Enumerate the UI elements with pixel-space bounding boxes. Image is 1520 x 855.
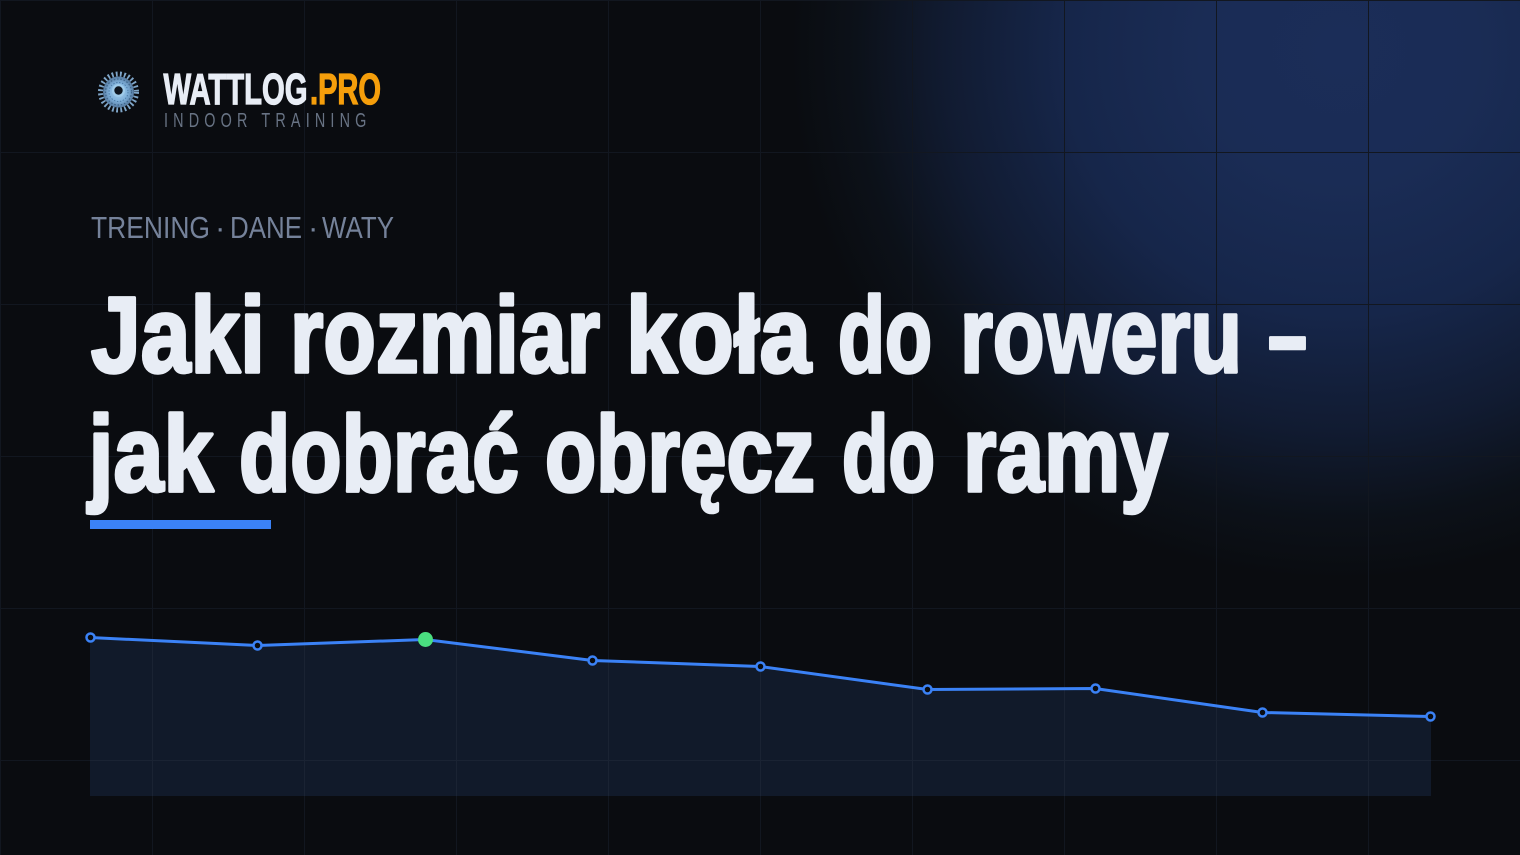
title: do [838, 274, 932, 395]
brand suffix: .PRO [310, 65, 381, 114]
icon: bicycle cassette [100, 74, 136, 110]
chart line [90, 638, 1430, 716]
title: – [1268, 274, 1307, 395]
title: rozmiar [290, 274, 600, 395]
title: ramy [963, 393, 1168, 514]
chart area fill [90, 638, 1431, 796]
highlighted point [418, 632, 433, 647]
eyebrow label: · [308, 210, 318, 245]
title: dobrać [239, 393, 519, 514]
eyebrow label: WATY [322, 210, 394, 245]
chart points [86, 634, 1434, 720]
eyebrow label: · [215, 210, 225, 245]
brand name: WATTLOG [164, 65, 308, 114]
title: jak [87, 393, 214, 514]
title: koła [626, 274, 812, 395]
title: roweru [960, 274, 1242, 395]
logo [100, 65, 381, 132]
eyebrow label: DANE [230, 210, 302, 245]
title: Jaki [91, 274, 265, 395]
title [87, 274, 1307, 514]
tagline: INDOOR TRAINING [164, 109, 366, 132]
title: obręcz [545, 393, 815, 514]
line chart [86, 632, 1434, 796]
title: do [842, 393, 935, 514]
eyebrow label [91, 210, 394, 245]
eyebrow label: TRENING [91, 210, 210, 245]
title accent underline [90, 520, 271, 529]
